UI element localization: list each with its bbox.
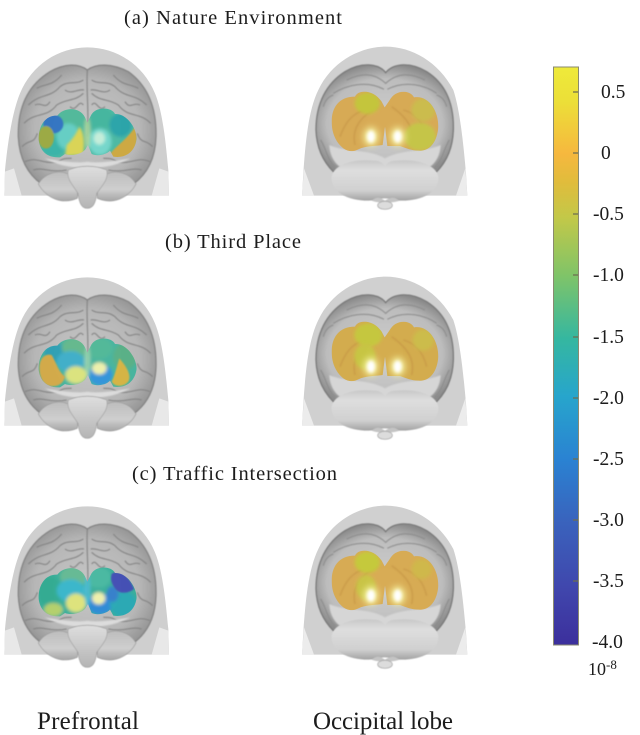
colour bar tick labels: 0.5 xyxy=(601,82,625,103)
brain: traffic intersection prefrontal xyxy=(4,506,169,667)
colour bar tick labels: -1.0 xyxy=(593,265,624,286)
colour bar tick labels: -3.0 xyxy=(593,510,624,531)
brain: third place prefrontal xyxy=(4,277,169,438)
colour bar scale exponent: 10 xyxy=(588,659,606,679)
colour bar tick labels: -3.5 xyxy=(593,571,624,592)
colour bar tick labels xyxy=(592,82,625,653)
colour bar scale exponent: -8 xyxy=(606,657,617,672)
title: (a) Nature Environment: (a) Nature Environment xyxy=(124,7,342,29)
colour bar xyxy=(554,67,578,645)
colour bar tick labels: -1.5 xyxy=(593,327,624,348)
brain: third place occipital xyxy=(302,277,467,439)
colour bar tick labels: -2.0 xyxy=(593,388,624,409)
colour bar tick labels: 0 xyxy=(601,143,611,164)
brain: nature environment occipital xyxy=(302,47,467,209)
colour bar tick labels: -2.5 xyxy=(593,449,624,470)
title: (b) Third Place: (b) Third Place xyxy=(165,231,301,253)
column label: Prefrontal: Prefrontal xyxy=(37,708,139,735)
colour bar tick labels: -0.5 xyxy=(593,204,624,225)
brain: traffic intersection occipital xyxy=(302,506,467,668)
colour bar tick labels: -4.0 xyxy=(592,632,623,653)
title: (c) Traffic Intersection: (c) Traffic Intersection xyxy=(132,463,337,485)
column label: Occipital lobe: Occipital lobe xyxy=(313,708,453,735)
brain: nature environment prefrontal xyxy=(4,47,169,208)
